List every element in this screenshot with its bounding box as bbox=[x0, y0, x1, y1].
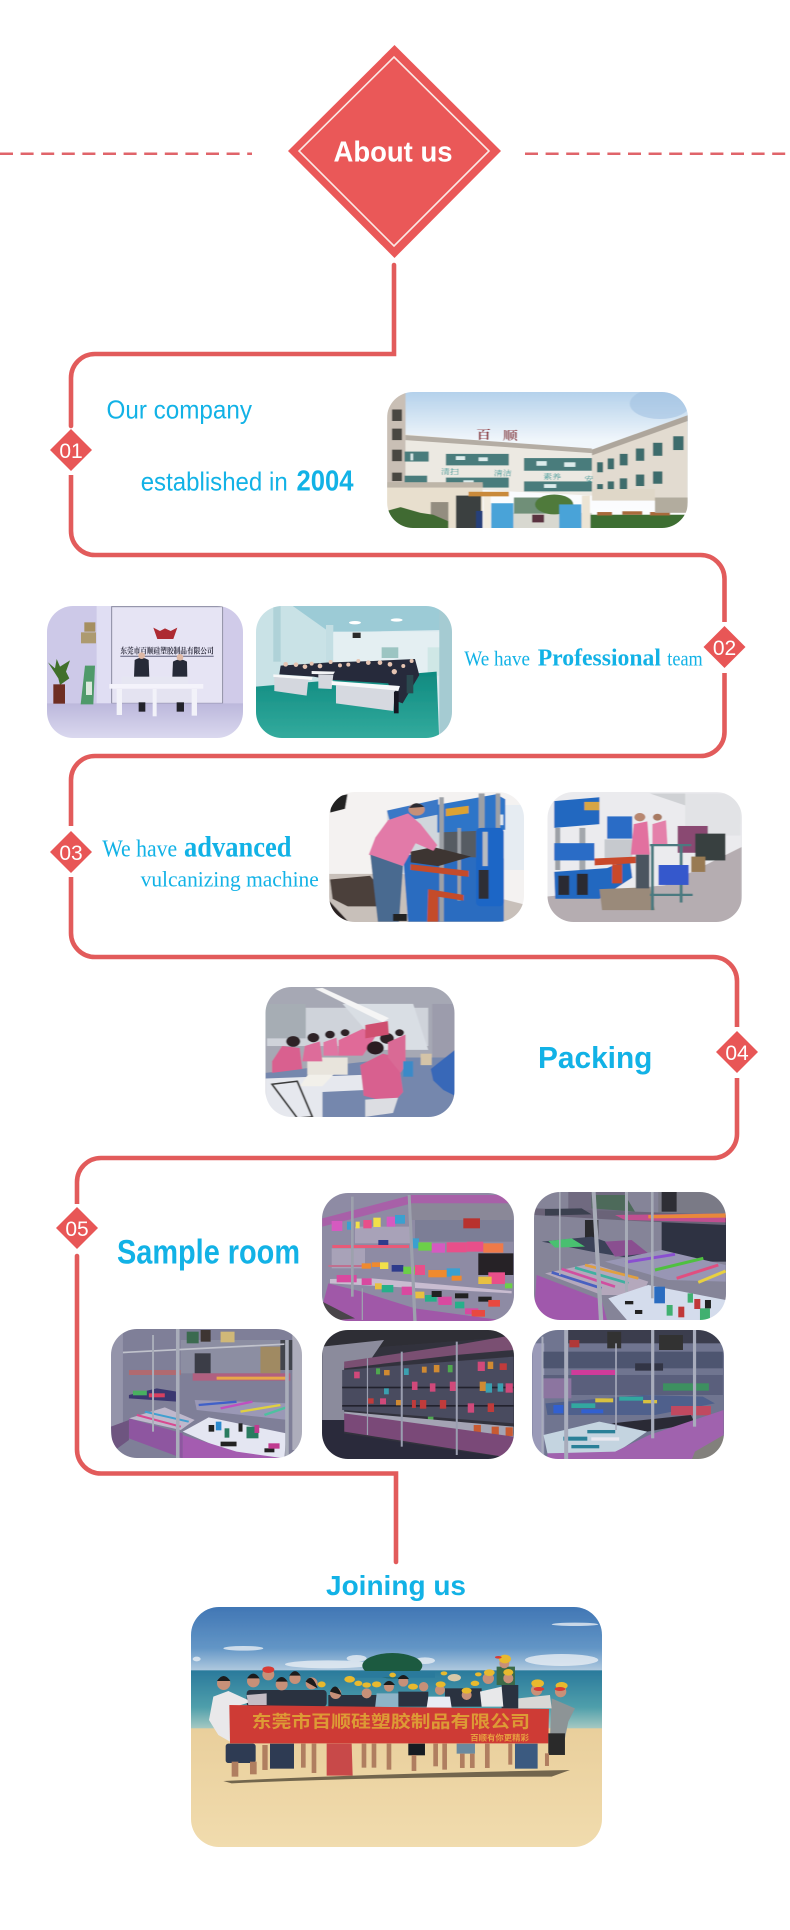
dashed rule: left bbox=[0, 153, 252, 155]
photo: packing workers bbox=[262, 985, 458, 1119]
text: We have advanced vulcanizing machine: vulcanizing machine bbox=[141, 867, 319, 892]
text: We have advanced vulcanizing machine bbox=[102, 832, 319, 892]
title diamond: About us: About us bbox=[334, 136, 452, 168]
photo: factory building: 安 bbox=[584, 475, 593, 483]
photo: factory building: 顺 bbox=[503, 429, 519, 442]
photo: factory building: 素养 bbox=[543, 472, 561, 481]
text: We have advanced vulcanizing machine: advanced bbox=[184, 832, 292, 864]
photo: sample cabinet 2 bbox=[532, 1190, 728, 1325]
badge 04 bbox=[716, 1031, 758, 1073]
photo: sample cabinet 4 bbox=[320, 1328, 516, 1462]
photo: sample cabinet 3 bbox=[109, 1327, 304, 1460]
badge 03: 03 bbox=[59, 842, 83, 865]
connector timeline bbox=[71, 265, 737, 1562]
text: We have Professional team: team bbox=[667, 646, 703, 670]
photo: factory building: 清扫 bbox=[441, 467, 459, 475]
text: Packing: Packing bbox=[538, 1040, 652, 1075]
text: We have advanced vulcanizing machine: We have bbox=[102, 837, 177, 863]
text: Our company established in 2004: established in bbox=[141, 467, 288, 497]
photo: factory building: 清洁 bbox=[494, 469, 512, 477]
photo: vulcanizing machine with worker bbox=[325, 790, 526, 924]
badge 03 bbox=[50, 831, 92, 873]
photo: reception desk bbox=[45, 602, 245, 742]
photo: team on the beach with banner: 东莞市百顺硅塑胶制品有限公司 bbox=[252, 1711, 530, 1731]
badge 05: 05 bbox=[65, 1218, 89, 1241]
text: Sample room: Sample room bbox=[117, 1234, 300, 1272]
badge 05 bbox=[56, 1207, 98, 1249]
photo: factory building bbox=[387, 388, 690, 531]
text: We have Professional team bbox=[464, 645, 703, 671]
title diamond: About us bbox=[288, 45, 501, 258]
text: We have Professional team: We have bbox=[464, 646, 530, 670]
badge 04: 04 bbox=[725, 1042, 749, 1065]
dashed rule: right bbox=[525, 153, 790, 155]
photo: sample cabinet 1 bbox=[320, 1192, 517, 1325]
photo: training room bbox=[253, 602, 453, 742]
text: Our company established in 2004 bbox=[106, 395, 354, 498]
heading: Joining us: Joining us bbox=[326, 1570, 466, 1601]
badge 01: 01 bbox=[59, 440, 83, 463]
photo: reception desk: 东莞市百顺硅塑胶制品有限公司 bbox=[120, 645, 214, 655]
badge 01 bbox=[50, 429, 92, 471]
photo: machine workshop line bbox=[544, 790, 746, 924]
badge 02: 02 bbox=[713, 637, 736, 660]
photo: factory building: 百 bbox=[476, 428, 491, 441]
text: Our company established in 2004: Our company bbox=[106, 395, 252, 425]
photo: sample cabinet 5 bbox=[531, 1328, 726, 1462]
photo: team on the beach with banner bbox=[190, 1605, 603, 1848]
badge 02 bbox=[704, 626, 746, 668]
text: Our company established in 2004: 2004 bbox=[296, 466, 354, 498]
text: We have Professional team: Professional bbox=[538, 645, 661, 671]
photo: team on the beach with banner: 百顺有你更精彩 bbox=[470, 1732, 529, 1742]
